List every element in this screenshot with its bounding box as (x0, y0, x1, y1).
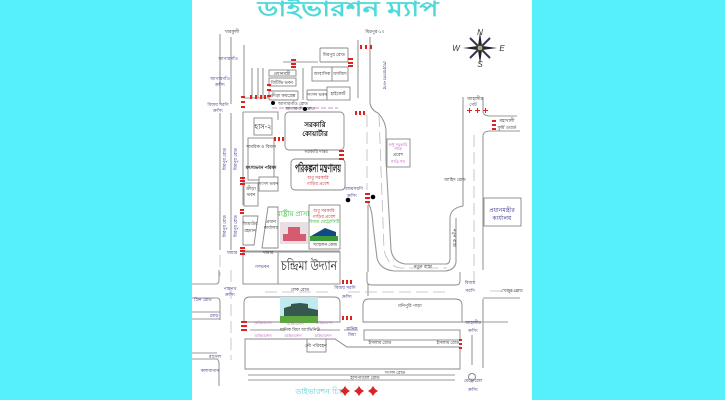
block: Planning Ministry: গাড়ির প্রবেশ (307, 181, 331, 186)
Prime Minister's Office (484, 198, 521, 226)
block: Housing: হাস-২ (253, 124, 272, 131)
road labels: মিরপুর রোড (222, 147, 227, 171)
pink box: গাড়ি (394, 146, 402, 151)
national parliament block: ডাইভারশন (314, 320, 333, 325)
block: upper right market (367, 272, 460, 285)
road labels: বিজয়সরণি (342, 186, 364, 191)
compass rose: E (499, 44, 505, 53)
picture: blue green building (310, 225, 338, 241)
block: trapezoid buildings: কার্যালয় (263, 224, 280, 230)
national parliament block: ডাইভারশন (285, 321, 304, 326)
road labels: নতুন রাস্তা (413, 264, 433, 269)
national parliament block: ডাইভারশন (253, 320, 272, 325)
top blocks: আগারগাঁও রোড (284, 105, 316, 111)
block: strip labels: ইসলাম রোড (368, 340, 392, 345)
road labels: আগারগাঁও (209, 75, 230, 81)
block: left buildings: মৎস্যভবন পরিষদ (245, 164, 277, 170)
block: Planning Ministry: সরকারি দপ্তর (303, 149, 328, 154)
pink box: শুধু সরকারি (388, 142, 408, 147)
picture: pink building (280, 222, 308, 244)
road labels: মিয়া (347, 332, 357, 337)
compass rose: S (477, 60, 483, 69)
exhibition: Rashtriya Atithi Bhaban (276, 209, 313, 244)
roundabout at metro crossing (468, 374, 476, 380)
block: left buildings: ভবন (246, 192, 257, 197)
top blocks (269, 48, 350, 112)
compass rose (452, 28, 505, 69)
road labels: ক্রসিং (214, 82, 225, 87)
exhibition: convention centre (308, 205, 340, 249)
national parliament block: মানিক মিয়া অ্যাভিনিউ (279, 326, 320, 332)
block: left buildings: সংসদ ভবন (257, 181, 279, 186)
pink box: প্রবেশ (393, 152, 404, 157)
road labels: ক্রসিং (467, 387, 478, 392)
top blocks: মসজিদ (332, 71, 347, 76)
top blocks: আবাসিক (313, 71, 331, 76)
Chandrima Udyan block: গণভবন (255, 264, 270, 269)
exhibition: convention centre: শুধু সরকারি (312, 208, 335, 213)
block: Monipuri Para (363, 299, 462, 322)
Prime Minister's Office: প্রধানমন্ত্রীর (489, 206, 516, 214)
block: Housing (253, 118, 272, 135)
road labels: ক্রসিং (341, 294, 352, 299)
block: strip labels: হাসপাতাল রোড (349, 375, 380, 380)
compass rose: W (452, 44, 461, 53)
Jahangir Gate label: কুর্মি ওয়ার্ড (497, 124, 517, 130)
block: Planning Ministry: শুধু সরকারি (306, 175, 329, 180)
road labels: খারকুলী (225, 28, 240, 34)
legend: diversion sign: ডাইভারশন চিহ্ন (294, 387, 346, 396)
exhibition: Rashtriya Atithi Bhaban: রাষ্ট্রীয় প্রাসাদ (276, 209, 313, 218)
legend: diversion sign (294, 386, 378, 396)
road labels: ক্রসিং (467, 328, 478, 333)
national parliament block (244, 297, 340, 352)
block: Planning Ministry: পরিকল্পনা মন্ত্রণালয় (295, 161, 341, 175)
road labels: মিরপুর রোড (222, 214, 227, 238)
block: Government quarters: কোয়ার্টার (302, 128, 329, 138)
top blocks: সংসদ ভবন (306, 92, 328, 97)
block: trapezoid buildings (241, 207, 340, 255)
markers: road block red triples (240, 45, 496, 349)
national parliament block: ডাইভারশন (313, 333, 332, 338)
road labels: মিরপুর-১০ (364, 29, 385, 34)
road labels: সরণি (464, 288, 476, 293)
road labels: শেরেবাংলা নগর (382, 61, 387, 90)
road labels: খেজুর রোড (501, 288, 523, 293)
road network (192, 34, 520, 386)
block: left buildings: ক্রীড়া (245, 185, 256, 191)
block: strip labels: ইসলাম রোড (436, 340, 460, 345)
top blocks: বিটিভি ভবন (270, 79, 294, 85)
road labels: ক্রসিং (224, 292, 235, 297)
road labels: জাহিদ রোড (443, 177, 466, 182)
national parliament block: ডাইভারশন (283, 333, 302, 338)
road labels: জাহাঙ্গীর (464, 319, 481, 325)
road labels: গ্রিন রোড (193, 297, 212, 302)
block: Government quarters (285, 112, 344, 150)
road labels: মেট্রোরেল (464, 377, 483, 383)
road labels: মিরপুর রোড (233, 214, 238, 238)
pink box: গাড়ি পথ (391, 159, 406, 164)
top blocks: ক্রীড়া কমপ্লেক্স (270, 92, 296, 98)
exhibition: convention centre: গাড়ির প্রবেশ (313, 214, 337, 219)
block: Planning Ministry (291, 149, 345, 190)
top blocks: প্রধানমন্ত্রী (274, 70, 291, 76)
block: strip labels (349, 330, 460, 380)
compass rose: N (477, 28, 483, 37)
road labels: খামার (227, 250, 238, 255)
road labels (193, 28, 523, 392)
road labels: ক্রসিং (212, 108, 223, 113)
top blocks: মিরপুর রোড (322, 52, 346, 57)
Jahangir Gate label (466, 95, 517, 130)
road labels: মানিক (346, 326, 358, 331)
block: trapezoid buildings: খামার (263, 250, 274, 255)
road labels: বিজয় (464, 280, 477, 285)
road labels: ক্রসিং (346, 193, 357, 198)
block: Government quarters: সরকারি (303, 120, 327, 129)
road labels: মিরপুর রোড (233, 147, 238, 171)
road labels: বিজয় সরণি (206, 102, 230, 107)
block: strip labels: সংসদ রোড (384, 370, 406, 375)
block: left buildings: সামরিক ও বিমান (245, 144, 277, 149)
parliament building picture (280, 297, 318, 323)
road labels: লেক রোড (291, 287, 310, 292)
block: trapezoid buildings: প্রধান (266, 219, 277, 224)
road labels: রাসেল (208, 354, 222, 359)
block: Monipuri Para: মনিপুরি পাড়া (397, 303, 422, 308)
road labels: মোড় (210, 313, 219, 318)
markers: black dots (271, 101, 375, 202)
exhibition: convention centre: বিজয় মেট্রোসিটি (308, 218, 340, 224)
national parliament block: নৌ পরিবহন (305, 343, 328, 348)
road labels: আগারগাঁও (217, 55, 238, 61)
Chandrima Udyan block (243, 252, 340, 284)
top blocks: হাইকোর্ট (330, 90, 346, 96)
block: lower strip (245, 339, 460, 369)
top blocks: আগারগাঁও রোড (277, 100, 309, 106)
Jahangir Gate label: জাহাঙ্গীর (466, 95, 483, 101)
block: trapezoid buildings: রহমান (243, 228, 257, 233)
Jahangir Gate label: মহাখালী (498, 117, 515, 123)
exhibition: convention centre: সম্মেলন কেন্দ্র (312, 242, 338, 247)
pink box (387, 139, 410, 167)
Prime Minister's Office: কার্যালয় (491, 215, 512, 222)
road labels: নতুন রাস্তা (452, 228, 457, 248)
national parliament block: ডাইভারশন (253, 333, 272, 338)
Chandrima Udyan block: চন্দ্রিমা উদ্যান (280, 258, 337, 273)
Jahangir Gate label: গেট (469, 101, 477, 107)
road labels: পান্থপথ (224, 286, 238, 291)
road labels: কলাবাগান (200, 368, 221, 373)
block: left buildings (243, 112, 279, 206)
block: trapezoid buildings: জিয়াউর (241, 220, 258, 226)
road labels: বিজয় সরণি (333, 285, 357, 290)
